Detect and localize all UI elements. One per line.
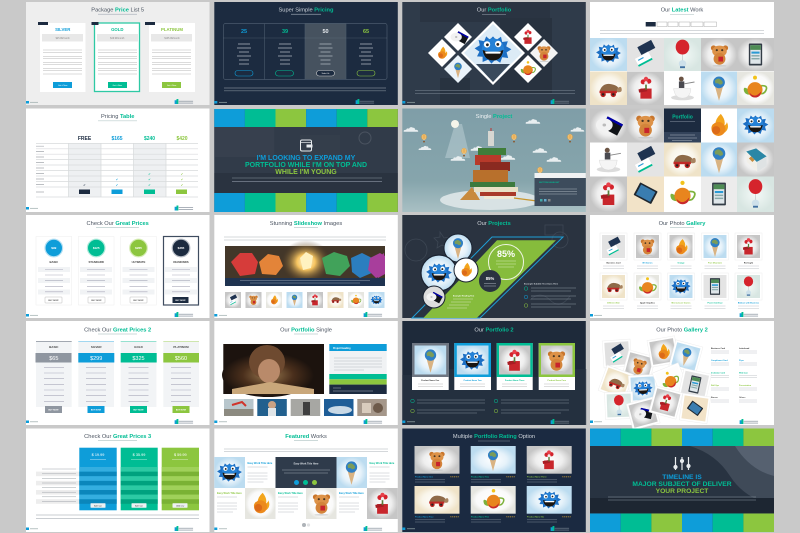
card: bear: Product Name Four xyxy=(548,379,566,382)
slide: Check Our Great Prices 3 xyxy=(26,428,210,532)
card: platinum xyxy=(145,22,195,92)
feature list: Others xyxy=(739,396,746,399)
blue diagonal stripes xyxy=(412,237,563,318)
tile: teapot: Product Name Five xyxy=(471,516,490,518)
tile: mascot: ★★★★★ xyxy=(562,516,571,518)
slideshow image xyxy=(225,240,385,286)
gallery row two captions: Balloon with Business xyxy=(738,302,760,305)
circle: mascot xyxy=(421,255,457,291)
footer xyxy=(26,312,193,317)
headline: PORTFOLIO WHILE I'M ON TOP AND xyxy=(245,162,367,169)
book and suitcase tower xyxy=(460,128,560,204)
headline: MAJOR SUBJECT OF DELIVER xyxy=(632,481,732,488)
feature list xyxy=(524,282,576,307)
title: Stunning Slideshow Images xyxy=(270,221,342,227)
tile: ice cream: Product Name Two xyxy=(471,476,490,478)
feature list: Letterhead xyxy=(739,347,750,350)
slide: Portfolio mosaic xyxy=(590,108,774,212)
green panel caption: Example Heading Text xyxy=(453,294,475,298)
row one tiles xyxy=(590,108,774,142)
row three tiles xyxy=(590,176,774,212)
title: Our Portfolio Single xyxy=(280,328,332,334)
caption lines xyxy=(232,178,382,181)
spotlight lamp xyxy=(451,120,459,128)
title: Our Photo Gallery 2 xyxy=(656,328,708,334)
gallery row two captions: Mini Leisure Games xyxy=(672,303,691,305)
plan: diamonds highlighted: BUY NOW! xyxy=(175,300,186,302)
title: Check Our Great Prices xyxy=(87,221,149,227)
tile: bear: ★★★★★ xyxy=(450,476,459,478)
clouds xyxy=(404,119,584,162)
gallery row one captions xyxy=(603,262,759,268)
column: gold xyxy=(121,341,157,413)
row one: Easy Work Title Here xyxy=(370,462,395,465)
footer xyxy=(590,312,758,317)
footer xyxy=(26,526,193,531)
slide: Featured Works xyxy=(214,428,398,532)
thumbnail strip xyxy=(225,292,384,308)
photo backdrop xyxy=(214,127,398,193)
card: silver: Get it Now xyxy=(58,84,68,87)
plan: standard: $125 xyxy=(93,246,100,250)
headline: YOUR PROJECT xyxy=(656,488,709,495)
table: ✔ xyxy=(83,183,86,187)
green parallelogram xyxy=(423,240,556,318)
column: gold: $325 xyxy=(132,356,145,362)
colour bands bottom xyxy=(214,193,398,212)
small percentage ring xyxy=(480,270,500,292)
table: $165 xyxy=(111,136,123,142)
column: platinum: $560 xyxy=(175,356,187,362)
title: Super Simple Pricing xyxy=(278,8,334,14)
pricing table xyxy=(224,23,387,80)
slide: Our Latest Work xyxy=(590,2,774,105)
footer xyxy=(402,419,569,424)
project info panel: SECTION HIGHLIGHT xyxy=(539,182,560,184)
slide: Super Simple Pricing xyxy=(214,2,398,105)
info panel: Project Heading xyxy=(333,347,351,350)
icon: sliders xyxy=(674,457,690,470)
filter tabs xyxy=(646,22,716,26)
table: ✔ xyxy=(148,172,151,176)
column: green: Add now xyxy=(176,504,185,507)
title: Single Project xyxy=(476,114,512,120)
large percentage ring: 85% xyxy=(497,249,515,259)
card: mascot: Product Name Two xyxy=(464,379,482,382)
diamond: gift xyxy=(514,23,542,51)
info panel xyxy=(329,344,387,394)
tile grid xyxy=(590,38,774,105)
slide: Package Price List 5 xyxy=(26,2,210,105)
row two: Easy Work Title Here xyxy=(339,492,364,495)
column: basic: $65 xyxy=(49,356,58,362)
gallery row one xyxy=(600,233,762,260)
feature list: Business Card xyxy=(711,348,726,350)
small percentage ring: 85% xyxy=(486,276,494,281)
card: gold highlighted: GOLD xyxy=(111,27,124,32)
slide: Our Portfolio 2 xyxy=(402,321,586,425)
feature list: Web Icon xyxy=(739,372,749,374)
card: platinum: PLATINUM xyxy=(161,27,183,32)
circle: ice cream xyxy=(444,234,472,262)
diamond: bear xyxy=(530,39,558,67)
column: platinum xyxy=(163,341,199,413)
column: platinum: BUY NOW! xyxy=(176,410,186,412)
table: $240 xyxy=(144,136,155,142)
feature list: Compliment Card xyxy=(711,359,728,362)
card: ice cream: Product Name One xyxy=(421,379,440,382)
table: $420 xyxy=(176,136,188,142)
colour bands top xyxy=(590,428,774,446)
icon: wallet xyxy=(300,140,312,151)
gallery row one captions: Business Card xyxy=(606,263,621,265)
paragraph lines xyxy=(415,90,575,94)
title: Check Our Great Prices 3 xyxy=(84,434,151,440)
card: silver xyxy=(38,22,86,92)
feature list: Presentation xyxy=(739,384,752,387)
doodle backdrop xyxy=(405,225,570,304)
main photo: child reading xyxy=(222,344,324,397)
row one xyxy=(214,457,395,488)
column: basic: BASIC xyxy=(49,345,59,349)
slide: Timeline title banner xyxy=(590,428,774,532)
column: green xyxy=(162,448,199,510)
gallery row two captions xyxy=(603,302,760,308)
tile: mascot: Product Name Six xyxy=(527,516,545,518)
card: silver: $25.99/month xyxy=(56,37,70,40)
title: Multiple Portfolio Rating Option xyxy=(453,434,535,440)
footer xyxy=(590,419,758,424)
gallery row two xyxy=(600,273,762,300)
main diamond: mascot xyxy=(461,21,525,85)
plan: diamonds highlighted: DIAMONDS xyxy=(173,260,189,264)
subtitle lines xyxy=(98,13,137,15)
feature list: Banner xyxy=(711,397,718,399)
slide: Our Photo Gallery 2 xyxy=(590,321,774,430)
pagination dots xyxy=(302,523,310,527)
photo backdrop xyxy=(420,2,552,105)
plan: diamonds highlighted: $365 xyxy=(178,246,185,250)
spotlight beam xyxy=(445,124,470,158)
slide: Single Project xyxy=(402,108,586,212)
slide: Our Projects xyxy=(402,215,586,318)
plan: standard: BUY NOW! xyxy=(91,300,102,302)
feature list: Roll Ups xyxy=(711,385,720,387)
table: ✔ xyxy=(116,183,119,187)
card: ice cream xyxy=(412,343,449,390)
tile: teapot: ★★★★★ xyxy=(506,516,515,518)
pricing table: 39 xyxy=(282,29,288,35)
table: ✔ xyxy=(148,178,151,182)
title: Featured Works xyxy=(285,434,327,440)
footer xyxy=(26,99,193,104)
row two: Easy Work Title Here xyxy=(217,492,242,495)
tile: ice cream: ★★★★★ xyxy=(506,476,515,478)
feature list xyxy=(711,347,757,402)
card: silver: SILVER xyxy=(55,27,71,32)
card: platinum: $135.99/month xyxy=(164,37,180,40)
card: platinum: Get it Now xyxy=(167,84,177,87)
gallery row one captions: Orange xyxy=(677,263,685,265)
column: teal: Add now xyxy=(135,504,143,507)
title: Package Price List 5 xyxy=(91,8,144,14)
row one: Easy Work Title Here xyxy=(248,462,273,465)
feature list: Example Subtitle Text Goes Here xyxy=(524,282,559,286)
title: Our Portfolio 2 xyxy=(474,328,514,334)
footer xyxy=(402,526,569,531)
circle: cd xyxy=(423,286,445,308)
card: gift: Product Name Three xyxy=(505,379,525,382)
gallery row one captions: Red Light xyxy=(744,262,753,265)
scattered photos xyxy=(598,336,711,430)
card: gold highlighted: $49.99/month xyxy=(110,37,125,40)
column: gold: GOLD xyxy=(134,345,144,349)
slide: portfolio quote banner xyxy=(214,109,398,212)
card: gold highlighted: Get it Now xyxy=(113,84,123,87)
pricing table: 25 xyxy=(241,29,247,35)
skyline backdrop xyxy=(402,363,586,425)
tile: ice cream xyxy=(471,446,516,482)
card: gift xyxy=(497,343,533,390)
column: silver xyxy=(78,341,114,413)
card: bear xyxy=(539,343,575,390)
circle: fire xyxy=(454,258,478,282)
column: silver: $299 xyxy=(90,356,102,362)
feature list: Invitation Card xyxy=(711,372,726,374)
footer xyxy=(26,419,193,424)
headline: I'M LOOKING TO EXPAND MY xyxy=(257,155,356,162)
gallery row two captions: Apple Graphics xyxy=(640,302,656,305)
slide: Our Photo Gallery xyxy=(590,215,774,318)
pricing table: 50 xyxy=(322,29,329,35)
gallery row one captions: Wii Games xyxy=(642,263,653,265)
plan: ultimate: $265 xyxy=(135,246,142,250)
diamond: teapot xyxy=(514,55,542,83)
column: green: $ 59.99 xyxy=(174,453,187,457)
green panel caption xyxy=(447,294,475,308)
footer xyxy=(214,99,374,104)
plan: ultimate: BUY NOW! xyxy=(133,300,144,302)
footer xyxy=(214,526,382,531)
row one: Easy Work Title Here xyxy=(294,462,319,466)
column: teal xyxy=(121,448,158,510)
footer xyxy=(214,419,382,424)
project info panel xyxy=(534,173,586,206)
gallery row two captions: Poster Interface xyxy=(707,302,723,305)
table: FREE xyxy=(78,136,92,142)
slide: Our Portfolio Single xyxy=(214,321,398,425)
tile: gift: ★★★★★ xyxy=(562,476,571,478)
tile: gift: Product Name Three xyxy=(527,476,547,478)
row two: Easy Work Title Here xyxy=(278,492,303,495)
headline: TIMELINE IS xyxy=(662,474,702,481)
paragraph lines xyxy=(224,88,386,91)
title: Our Latest Work xyxy=(661,8,703,14)
title: Pricing Table xyxy=(101,114,134,120)
diamond: ice xyxy=(444,55,472,83)
column: blue: $ 19.99 xyxy=(92,453,104,457)
tile: turtle: Product Name Four xyxy=(415,516,434,518)
table: ✔ xyxy=(181,172,184,176)
plan: basic xyxy=(36,236,72,305)
column: blue xyxy=(79,448,117,510)
headline xyxy=(245,155,367,176)
plan: diamonds highlighted xyxy=(164,236,198,305)
row two xyxy=(217,488,398,519)
headline xyxy=(632,474,732,495)
column: basic: BUY NOW! xyxy=(48,410,59,412)
column: gold: BUY NOW! xyxy=(133,410,144,412)
large percentage ring xyxy=(488,244,524,280)
card: gold highlighted xyxy=(92,22,140,92)
hot air balloons xyxy=(421,134,573,175)
feature labels xyxy=(36,467,80,504)
column: teal: $ 35.99 xyxy=(133,453,145,457)
tile: mascot xyxy=(527,486,572,522)
ground island xyxy=(440,190,540,210)
feature list: Flyer xyxy=(739,360,744,362)
slide: Check Our Great Prices xyxy=(26,215,210,318)
tile: gift xyxy=(527,446,572,482)
column: silver: SILVER xyxy=(91,345,102,349)
table: ✔ xyxy=(181,183,184,187)
plan: ultimate xyxy=(121,236,156,305)
tile: bear xyxy=(414,446,460,482)
slide: Our Portfolio diamonds xyxy=(402,2,586,105)
slide: Check Our Great Prices 2 xyxy=(26,321,210,425)
title: Our Photo Gallery xyxy=(659,221,706,227)
title: Our Projects xyxy=(477,221,511,227)
footer xyxy=(214,312,382,317)
column: blue: Add now xyxy=(94,504,102,507)
notes xyxy=(411,399,569,413)
portfolio label panel xyxy=(664,108,701,142)
plan: basic: BASIC xyxy=(49,260,58,264)
pricing table: Select Us xyxy=(322,72,329,75)
photo backdrop: hand and chess xyxy=(590,446,774,513)
plan: basic: $99 xyxy=(51,246,57,250)
gallery row one captions: Pure Mountain xyxy=(708,262,723,265)
plan: ultimate: ULTIMATE xyxy=(132,260,145,264)
diamond: fire xyxy=(428,39,456,67)
table: ✔ xyxy=(148,183,151,187)
title: Check Our Great Prices 2 xyxy=(84,328,151,334)
colour bands bottom xyxy=(590,514,774,532)
slide: Pricing Table xyxy=(26,108,210,212)
headline: WHILE I'M YOUNG xyxy=(275,169,337,176)
column: platinum: PLATINUM xyxy=(173,345,189,349)
gallery row two captions: Different Site xyxy=(607,302,621,305)
diamond: card xyxy=(444,23,472,51)
plan: basic: BUY NOW! xyxy=(48,300,59,302)
plan: standard: STANDARD xyxy=(88,260,104,264)
table: ✔ xyxy=(181,178,184,182)
portfolio label panel: Portfolio xyxy=(672,114,693,120)
thumbnail strip xyxy=(224,399,387,416)
footer xyxy=(402,99,569,104)
table: ✔ xyxy=(116,178,119,182)
column: silver: BUY NOW! xyxy=(91,410,101,412)
pricing table: 65 xyxy=(363,29,369,35)
table xyxy=(36,136,198,197)
plan: standard xyxy=(78,236,114,305)
card: mascot xyxy=(454,343,491,390)
caption lines xyxy=(608,497,756,500)
row two tiles xyxy=(590,142,774,176)
slide: Stunning Slideshow Images xyxy=(214,215,398,318)
slide: Multiple Portfolio Rating Option xyxy=(402,428,586,532)
footer xyxy=(26,206,193,210)
tile: turtle: ★★★★★ xyxy=(450,516,459,518)
tile: turtle xyxy=(414,486,460,522)
column: basic xyxy=(36,341,72,413)
colour bands top xyxy=(214,109,398,127)
tile: bear: Product Name One xyxy=(415,476,434,478)
tile: teapot xyxy=(471,486,516,522)
title: Our Portfolio xyxy=(477,8,512,14)
